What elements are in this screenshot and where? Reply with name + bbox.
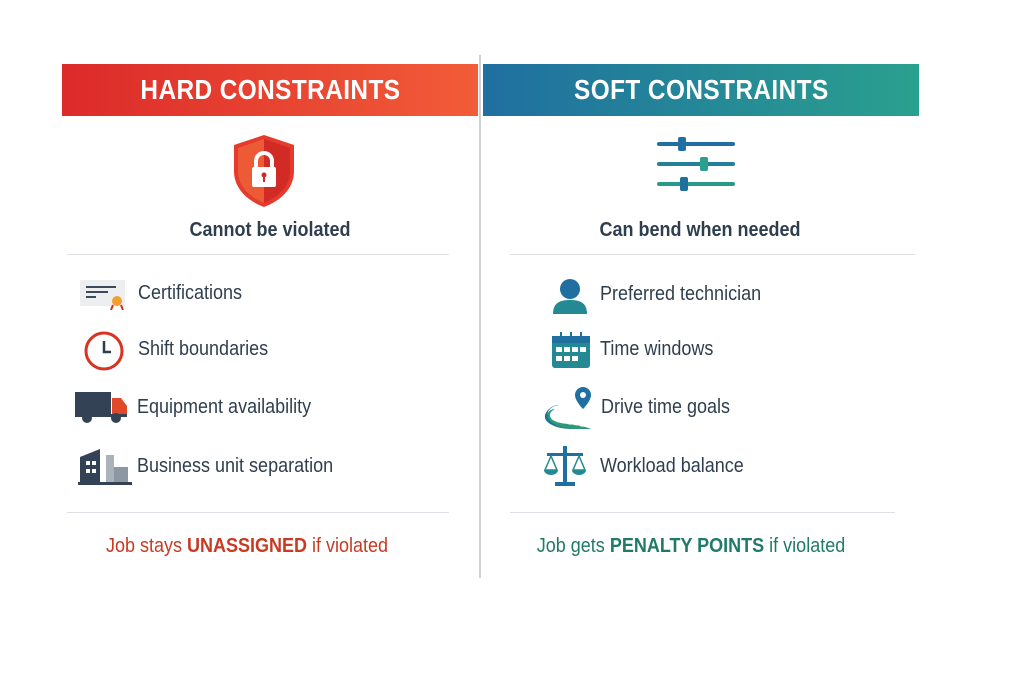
item: preferred technician	[553, 279, 761, 314]
footer note: penalty points: Job gets PENALTY POINTS if violated	[537, 535, 845, 557]
subtitle: Can bend when needed	[599, 219, 801, 241]
item: workload balance	[544, 446, 744, 486]
heading: soft constraints: SOFT CONSTRAINTS	[574, 74, 828, 105]
item: time windows: Time windows	[600, 338, 713, 360]
panel: soft constraints	[483, 64, 919, 557]
item: drive time goals	[545, 387, 730, 429]
heading: soft constraints	[483, 64, 919, 116]
heading: hard constraints	[62, 64, 478, 116]
item: equipment: Equipment availability	[137, 396, 311, 418]
item: equipment	[75, 392, 311, 423]
panel: hard constraints	[62, 64, 478, 557]
item: preferred technician: Preferred technician	[600, 283, 761, 305]
item: shift boundaries	[84, 332, 268, 370]
item: certifications	[80, 280, 242, 310]
item: business unit	[78, 449, 333, 485]
item: certifications: Certifications	[138, 282, 242, 304]
item: time windows	[552, 332, 713, 368]
footer note: unassigned: Job stays UNASSIGNED if violated	[106, 535, 388, 557]
icon: sliders	[657, 137, 735, 191]
heading: hard constraints: HARD CONSTRAINTS	[140, 74, 400, 105]
item: workload balance: Workload balance	[600, 455, 744, 477]
item: shift boundaries: Shift boundaries	[138, 338, 268, 360]
subtitle: Cannot be violated	[189, 219, 351, 241]
item: drive time goals: Drive time goals	[601, 396, 730, 418]
icon: shield lock	[234, 135, 294, 207]
item: business unit: Business unit separation	[137, 455, 333, 477]
